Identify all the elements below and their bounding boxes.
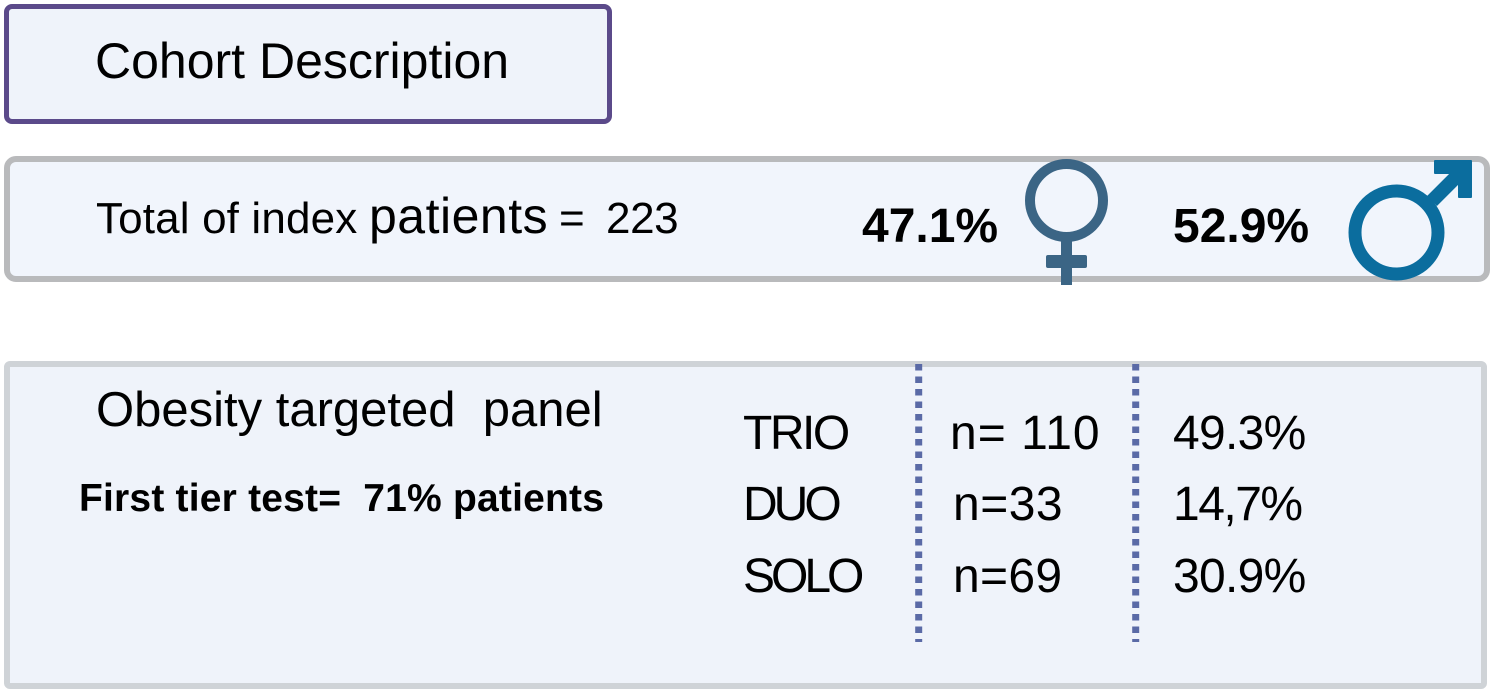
table: trio row bbox=[743, 407, 1306, 460]
panel: obesity targeted panel bbox=[4, 361, 1487, 689]
panel title: Obesity targeted panel bbox=[96, 383, 603, 437]
table: solo row: 30.9% bbox=[1173, 550, 1306, 603]
equals sign: = bbox=[559, 194, 585, 243]
table: trio row: n= 110 bbox=[950, 407, 1101, 460]
icon: male symbol bbox=[1348, 160, 1472, 280]
table: duo row: n=33 bbox=[953, 478, 1063, 531]
panel: total patients and sex ratio bbox=[4, 156, 1490, 282]
table: duo row: 14,7% bbox=[1173, 478, 1302, 531]
table: trio row: TRIO bbox=[743, 407, 848, 460]
table: solo row bbox=[743, 550, 1306, 603]
table: trio row: 49.3% bbox=[1173, 407, 1306, 460]
table: solo row: SOLO bbox=[743, 550, 860, 603]
female percentage: 47.1% bbox=[862, 200, 998, 253]
table: duo row: DUO bbox=[743, 478, 838, 531]
total count: 223 bbox=[606, 194, 678, 243]
icon: female symbol bbox=[1025, 159, 1108, 285]
patients word: patients bbox=[369, 188, 548, 244]
total of index label: Total of index bbox=[96, 194, 357, 243]
heading text: Cohort Description bbox=[95, 33, 509, 89]
panel: cohort description heading bbox=[4, 4, 612, 124]
first tier test text: First tier test= 71% patients bbox=[79, 477, 604, 520]
male percentage: 52.9% bbox=[1173, 200, 1309, 253]
table: duo row bbox=[743, 478, 1302, 531]
table: solo row: n=69 bbox=[953, 550, 1062, 603]
